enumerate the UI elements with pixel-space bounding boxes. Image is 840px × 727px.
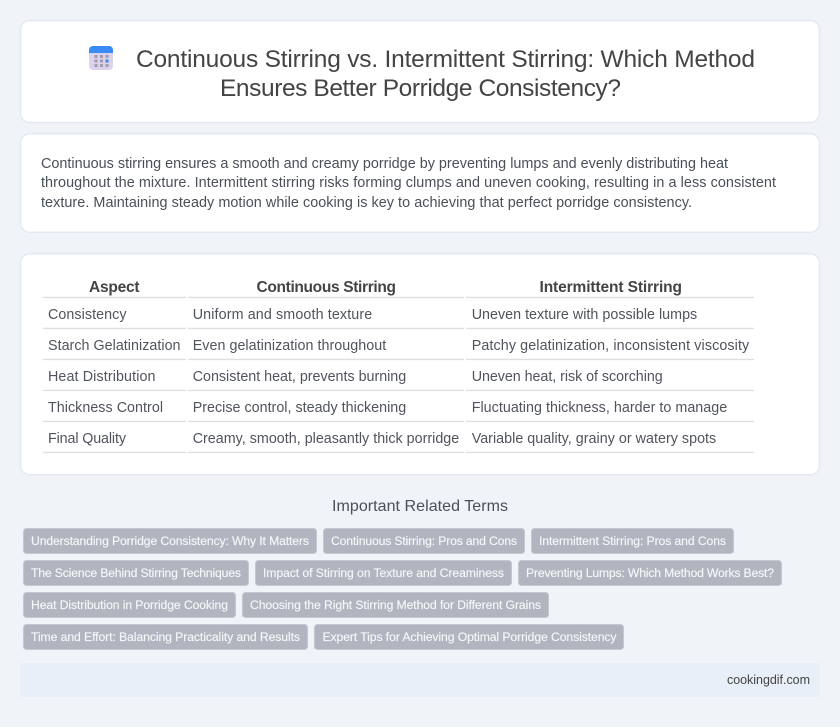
- summary text: [41, 156, 776, 211]
- tag: [532, 528, 734, 554]
- table header row: Intermittent Stirring: [540, 279, 682, 296]
- table row: consistency: Uniform and smooth texture: [193, 307, 372, 323]
- table row: starch gelatinization: Even gelatinization throughout: [193, 338, 386, 354]
- table row: final quality: Variable quality, grainy or watery spots: [472, 431, 716, 447]
- table row: consistency: [48, 307, 697, 323]
- tag: Understanding Porridge Consistency: Why It Matters: [31, 534, 309, 548]
- tag: [314, 624, 624, 650]
- summary text: throughout the mixture. Intermittent stirring risks forming clumps and uneven cooking, resulting in a less consistent: [41, 175, 776, 191]
- tag: [24, 624, 308, 650]
- tag: Choosing the Right Stirring Method for Different Grains: [250, 598, 541, 612]
- table row: consistency: Consistency: [48, 307, 127, 323]
- footer: cookingdif.com: [727, 673, 810, 687]
- tag: [256, 560, 512, 586]
- tag: Expert Tips for Achieving Optimal Porridge Consistency: [322, 630, 617, 644]
- table row: starch gelatinization: [48, 338, 750, 354]
- table row: consistency: Uneven texture with possible lumps: [472, 307, 697, 323]
- table row: thickness control: [48, 400, 727, 416]
- title: Ensures Better Porridge Consistency?: [220, 75, 621, 102]
- table row: final quality: Creamy, smooth, pleasantly thick porridge: [193, 431, 459, 447]
- summary text: texture. Maintaining steady motion while cooking is key to achieving that perfect porridge consistency.: [41, 195, 692, 211]
- tag: Continuous Stirring: Pros and Cons: [331, 534, 517, 548]
- panel: comparison table: [20, 254, 820, 475]
- tag: The Science Behind Stirring Techniques: [31, 566, 241, 580]
- tag: Preventing Lumps: Which Method Works Best?: [526, 566, 774, 580]
- summary text: Continuous stirring ensures a smooth and creamy porridge by preventing lumps and evenly distributing heat: [41, 156, 728, 172]
- tag: Intermittent Stirring: Pros and Cons: [539, 534, 726, 548]
- tag: [324, 528, 524, 554]
- table row: thickness control: Fluctuating thickness, harder to manage: [472, 400, 727, 416]
- table row: final quality: [48, 431, 716, 447]
- tag: Time and Effort: Balancing Practicality and Results: [31, 630, 300, 644]
- table header row: Continuous Stirring: [256, 279, 396, 296]
- table row: final quality: Final Quality: [48, 431, 127, 447]
- heading: related terms: Important Related Terms: [332, 498, 508, 515]
- tag: [518, 560, 782, 586]
- table header row: Aspect: [89, 279, 140, 296]
- panel: summary paragraph: [20, 134, 820, 232]
- table row: starch gelatinization: Starch Gelatinization: [48, 338, 181, 354]
- table row: heat distribution: [48, 369, 663, 385]
- title: [136, 46, 755, 102]
- tag: Heat Distribution in Porridge Cooking: [31, 598, 228, 612]
- tag: [242, 592, 548, 618]
- table row: heat distribution: Uneven heat, risk of scorching: [472, 369, 663, 385]
- title: Continuous Stirring vs. Intermittent Stirring: Which Method: [136, 46, 755, 73]
- table row: thickness control: Thickness Control: [48, 400, 163, 416]
- table row: thickness control: Precise control, steady thickening: [193, 400, 406, 416]
- table row: heat distribution: Consistent heat, prevents burning: [193, 369, 406, 385]
- icon: calendar: [89, 46, 113, 70]
- tag: [24, 528, 316, 554]
- related term tags: [24, 528, 782, 650]
- tag: [24, 560, 248, 586]
- tag: Impact of Stirring on Texture and Creaminess: [263, 566, 504, 580]
- tag: [24, 592, 236, 618]
- table row: starch gelatinization: Patchy gelatinization, inconsistent viscosity: [472, 338, 750, 354]
- footer: [20, 663, 820, 697]
- table header row: [89, 279, 682, 296]
- table row: heat distribution: Heat Distribution: [48, 369, 156, 385]
- panel: title card: [20, 20, 820, 122]
